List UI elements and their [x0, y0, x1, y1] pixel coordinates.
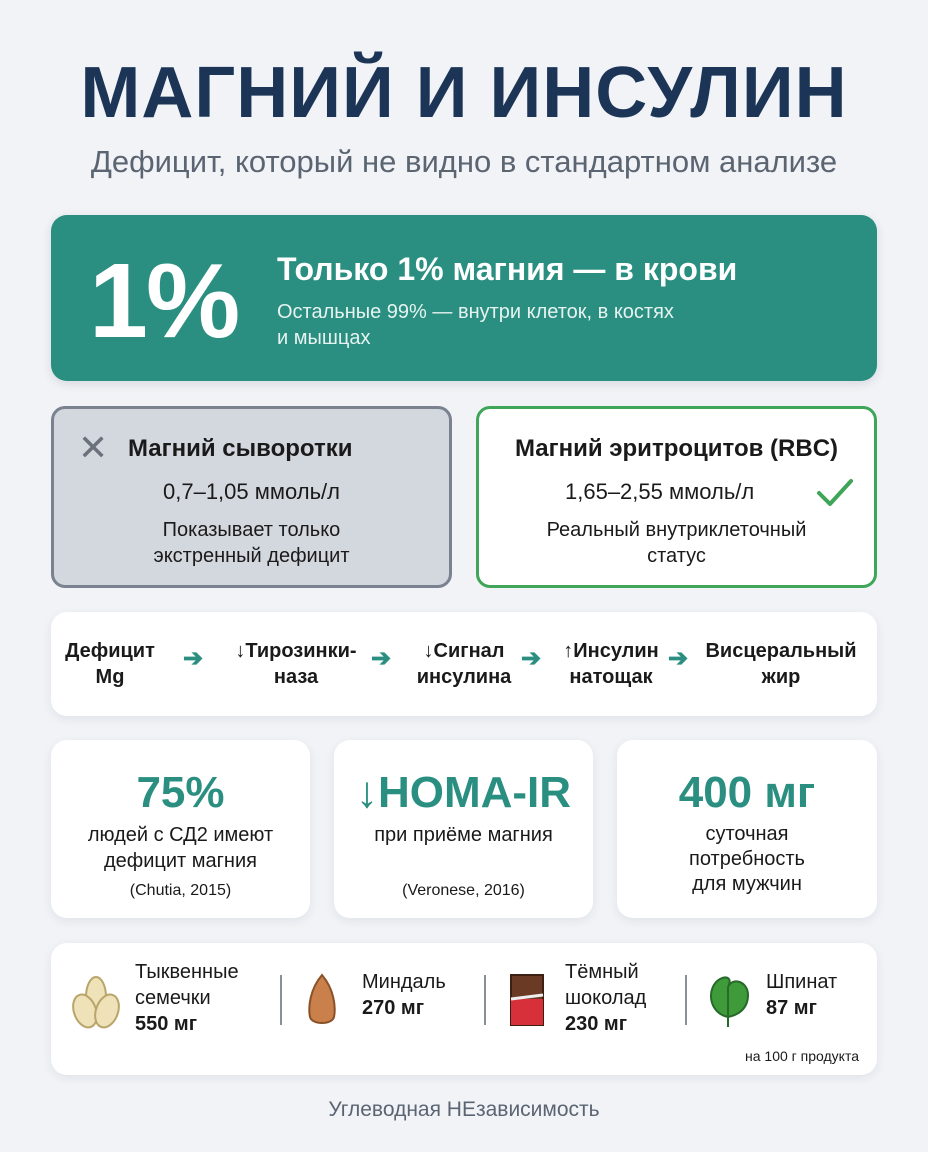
arrow: ➔	[521, 645, 541, 672]
banner heading: Только 1% магния — в крови	[277, 251, 737, 287]
item: dark chocolate	[510, 961, 646, 1035]
text	[88, 824, 273, 872]
citation: (Veronese, 2016)	[402, 882, 525, 899]
step 3	[417, 640, 512, 688]
step 2: ↓Тирозинки-	[235, 640, 357, 662]
item: pumpkin seeds	[72, 961, 239, 1035]
text: шоколад	[565, 987, 646, 1009]
text: для мужчин	[692, 873, 802, 895]
arrow: ➔	[371, 645, 391, 672]
banner text: и мышцах	[277, 327, 370, 349]
description: экстренный дефицит	[154, 545, 350, 567]
description	[547, 519, 806, 567]
text: при приёме магния	[374, 824, 553, 846]
text	[362, 971, 446, 1019]
text: 230 мг	[565, 1013, 627, 1035]
text: людей с СД2 имеют	[88, 824, 273, 846]
arrow: ➔	[668, 645, 688, 672]
text: дефицит магния	[104, 850, 257, 872]
number: 400 мг	[679, 768, 815, 817]
icon: almond	[308, 974, 336, 1024]
text: потребность	[689, 848, 805, 870]
item: almond	[308, 971, 446, 1024]
text: Тёмный	[565, 961, 639, 983]
arrow: ➔	[183, 645, 203, 672]
value: 0,7–1,05 ммоль/л	[163, 479, 340, 504]
icon: cross: ✕	[78, 427, 108, 468]
banner text	[277, 301, 674, 349]
item: spinach	[710, 971, 837, 1027]
step 5: Висцеральный	[705, 640, 857, 662]
step 1	[65, 640, 155, 688]
big number: 1%	[89, 242, 238, 360]
step 3: ↓Сигнал	[424, 640, 504, 662]
text: Шпинат	[766, 971, 837, 993]
description: Реальный внутриклеточный	[547, 519, 806, 541]
citation: (Chutia, 2015)	[130, 882, 231, 899]
icon: spinach leaf	[710, 976, 749, 1027]
title: МАГНИЙ И ИНСУЛИН	[80, 53, 848, 133]
panel: food sources	[51, 943, 877, 1075]
step 5	[705, 640, 857, 688]
step 5: жир	[762, 666, 800, 688]
step 1: Дефицит	[65, 640, 155, 662]
note: на 100 г продукта	[745, 1048, 859, 1064]
description	[154, 519, 350, 567]
step 3: инсулина	[417, 666, 511, 688]
step 2: наза	[274, 666, 318, 688]
text	[565, 961, 646, 1035]
text: 550 мг	[135, 1013, 197, 1035]
text: Тыквенные	[135, 961, 239, 983]
banner text: Остальные 99% — внутри клеток, в костях	[277, 301, 674, 323]
step 1: Mg	[96, 666, 124, 688]
heading: ↓HOMA-IR	[356, 768, 571, 817]
icon: seeds	[72, 976, 120, 1028]
description: Показывает только	[163, 519, 340, 541]
value: 1,65–2,55 ммоль/л	[565, 479, 754, 504]
icon: check	[816, 478, 854, 506]
step 4	[563, 640, 659, 688]
step 2	[235, 640, 357, 688]
text: Миндаль	[362, 971, 446, 993]
text	[135, 961, 239, 1035]
text	[689, 823, 805, 895]
icon: chocolate bar	[510, 974, 544, 1026]
text: 87 мг	[766, 997, 817, 1019]
heading: Магний эритроцитов (RBC)	[515, 435, 838, 462]
panel: RBC magnesium	[476, 406, 877, 588]
banner: 1% in blood	[51, 215, 877, 381]
text: суточная	[705, 823, 789, 845]
text: семечки	[135, 987, 211, 1009]
stat card: 400 mg	[617, 740, 877, 918]
number: 75%	[136, 768, 225, 817]
step 4: ↑Инсулин	[563, 640, 659, 662]
flow chain panel	[51, 612, 877, 716]
subtitle: Дефицит, который не видно в стандартном анализе	[91, 144, 837, 179]
text	[766, 971, 837, 1019]
panel: serum magnesium	[51, 406, 452, 588]
text: 270 мг	[362, 997, 424, 1019]
stat card: HOMA-IR	[334, 740, 593, 918]
step 4: натощак	[569, 666, 653, 688]
description: статус	[647, 545, 706, 567]
heading: Магний сыворотки	[128, 435, 352, 462]
stat card: 75%	[51, 740, 310, 918]
footer: Углеводная НЕзависимость	[328, 1098, 600, 1121]
